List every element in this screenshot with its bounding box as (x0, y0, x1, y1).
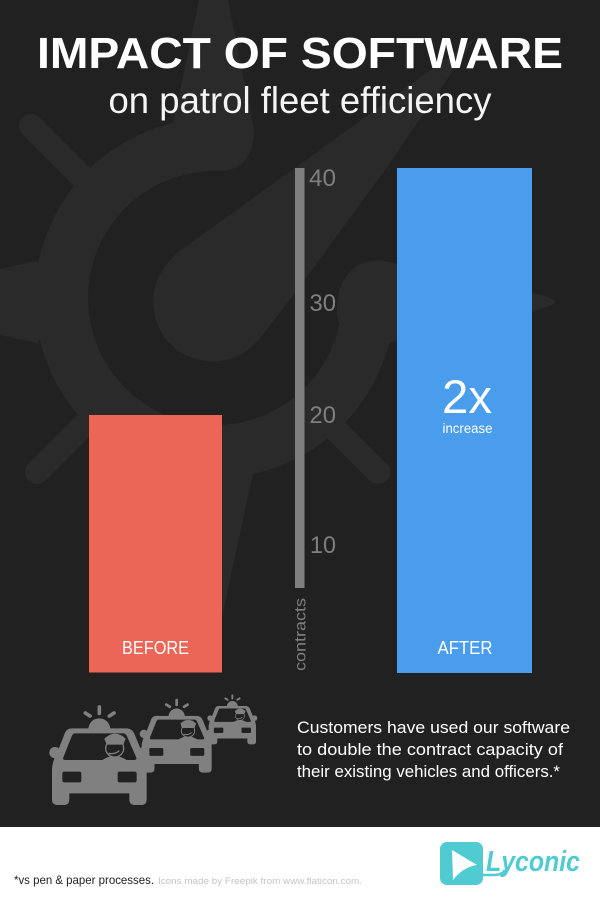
axis tick labels: 20 (310, 402, 336, 429)
bar: after (397, 168, 532, 673)
axis tick labels: 10 (310, 532, 336, 559)
description text: Customers have used our software (297, 718, 570, 737)
footer band (0, 827, 600, 900)
background compass watermark (0, 0, 555, 630)
axis tick labels: 30 (310, 290, 336, 317)
description text (297, 718, 570, 781)
subtitle: on patrol fleet efficiency (108, 80, 492, 121)
description text: to double the contract capacity of (297, 740, 563, 759)
description text: their existing vehicles and officers.* (297, 762, 560, 781)
title: IMPACT OF SOFTWARE (37, 30, 563, 78)
logo mark (440, 842, 483, 885)
bar: before: BEFORE (122, 638, 189, 658)
logo wordmark: Lyconic (486, 846, 580, 878)
axis tick labels (309, 165, 336, 559)
axis tick labels: 40 (309, 165, 336, 192)
axis title: contracts (292, 598, 310, 671)
icon: patrol cars (49, 695, 257, 805)
bar: after: AFTER (438, 638, 492, 658)
multiplier callout: 2x (442, 370, 492, 423)
attribution: Icons made by Freepik from www.flaticon.com. (158, 876, 362, 887)
axis (292, 165, 336, 671)
logo (440, 842, 580, 885)
multiplier callout: increase (442, 421, 492, 436)
footnote: *vs pen & paper processes. (14, 873, 154, 887)
bar: before (89, 415, 222, 672)
